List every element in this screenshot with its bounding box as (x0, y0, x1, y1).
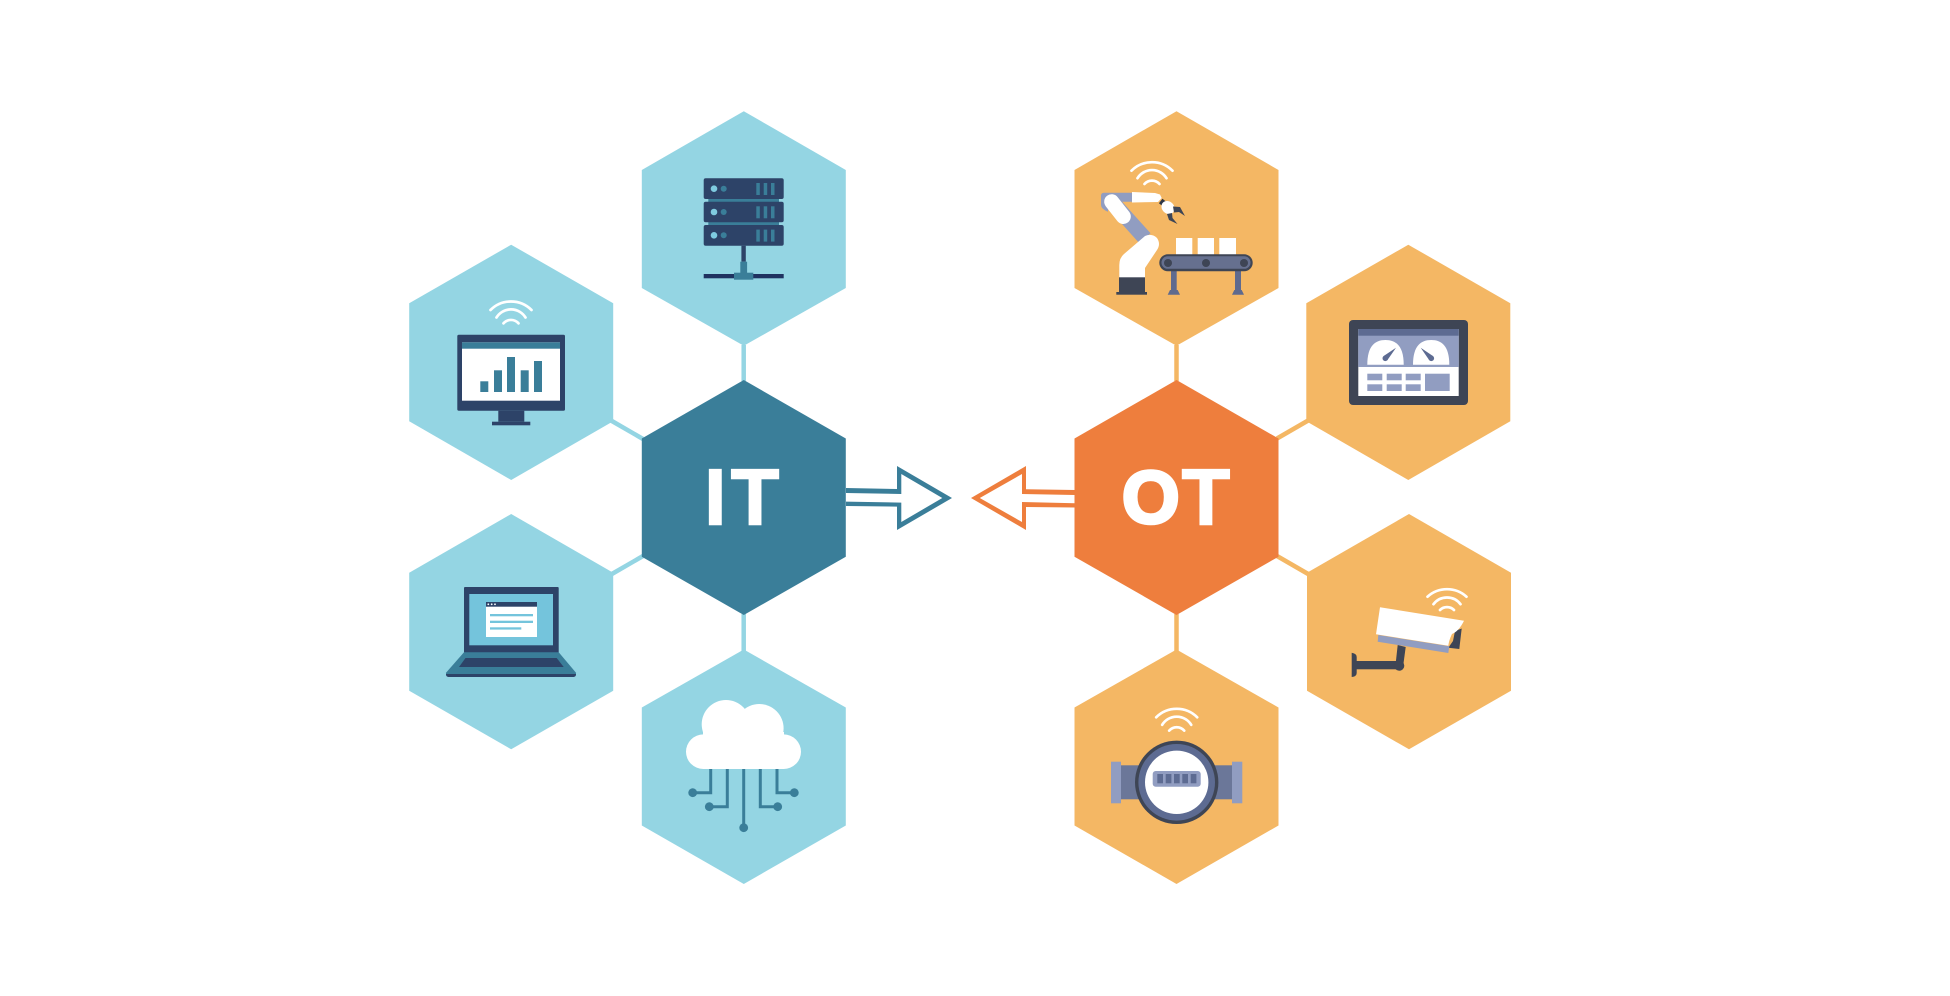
icon: dashboard monitor (457, 335, 565, 425)
arrow: IT outbound (846, 466, 952, 530)
icon: wifi signal (1156, 709, 1197, 731)
arrow: OT outbound (971, 466, 1075, 530)
icon: HMI gauges panel (1349, 320, 1468, 405)
hexagon: robot arm (1074, 111, 1278, 346)
label: OT: T (1182, 453, 1230, 542)
hexagon: cloud (642, 650, 846, 884)
panel: OT side (1074, 111, 1511, 884)
label: OT: O (1122, 456, 1180, 539)
icon: wifi signal (490, 302, 532, 323)
icon: laptop (446, 587, 576, 677)
hexagon: security camera (1307, 514, 1511, 749)
connectors: OT hub to satellites (1176, 345, 1309, 651)
hexagon: laptop (409, 514, 613, 749)
hexagon: server (642, 111, 846, 346)
hexagon: HMI panel (1306, 245, 1510, 480)
icon: security camera (1352, 607, 1464, 677)
icon: wifi signal (1132, 162, 1172, 184)
icon: robot arm and conveyor (1101, 192, 1253, 295)
hub: IT (642, 380, 846, 615)
connectors: IT hub to satellites (611, 345, 744, 651)
hexagon: smart meter (1074, 650, 1278, 884)
panel: IT side (409, 111, 846, 884)
hub: OT (1074, 380, 1278, 615)
label: IT: IT (704, 453, 779, 542)
icon: wifi signal (1428, 589, 1466, 610)
hexagon: monitor (409, 245, 613, 480)
icon: server rack (704, 178, 784, 280)
icon: cloud network (686, 700, 801, 832)
icon: smart flow meter (1111, 741, 1242, 824)
